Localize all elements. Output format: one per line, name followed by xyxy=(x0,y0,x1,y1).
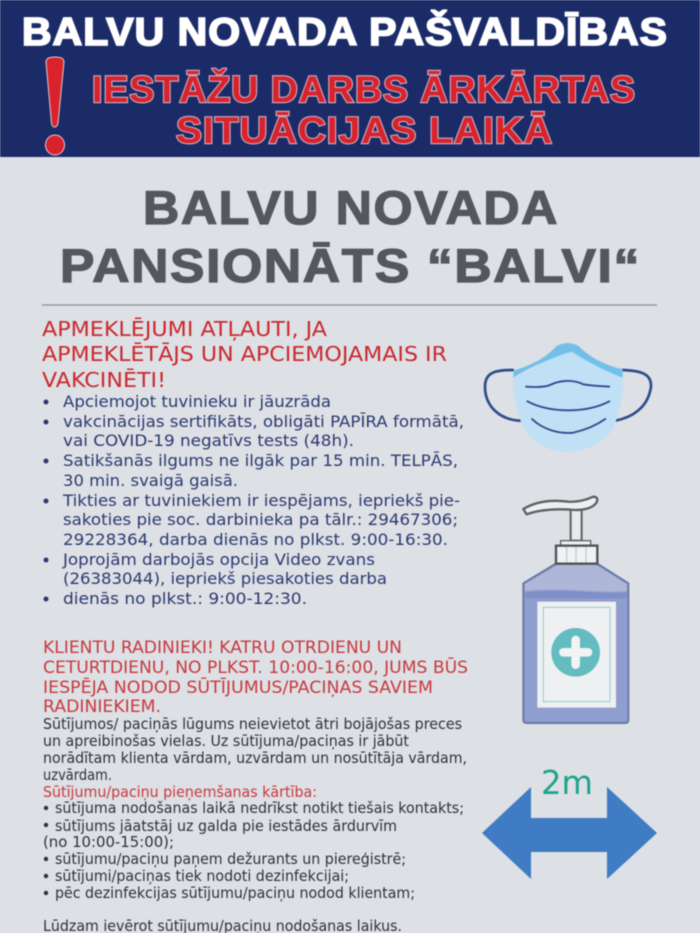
text block: parcel contents: un apreibinošas vielas. Uz sūtījuma/paciņas ir jābūt xyxy=(43,732,409,750)
text block: visit rules list: Apciemojot tuvinieku ir jāuzrāda xyxy=(63,392,331,411)
heading: visits allowed xyxy=(42,316,447,392)
text block: parcel contents: norādītam klienta vārdam, uzvārdam un nosūtītāja vārdam, xyxy=(43,749,467,767)
heading: clients' relatives parcels: IESPĒJA NODOD SŪTĪJUMUS/PACIŅAS SAVIEM xyxy=(43,676,433,698)
text block: parcel contents: Sūtījumos/ paciņās lūgums neievietot ātri bojājošas preces xyxy=(43,715,462,733)
heading: visits allowed: APMEKLĒTĀJS UN APCIEMOJAMAIS IR xyxy=(42,341,447,366)
icon: face mask xyxy=(485,343,651,452)
text block: visit rules list: dienās no plkst.: 9:00-12:30. xyxy=(63,589,307,608)
text block: visit rules list: sakoties pie soc. darbinieka pa tālr.: 29467306; xyxy=(63,510,458,529)
heading: clients' relatives parcels: CETURTDIENU, NO PLKST. 10:00-16:00, JUMS BŪS xyxy=(43,656,468,678)
title: pansionāts Balvi: BALVU NOVADA xyxy=(143,181,559,234)
heading: clients' relatives parcels: RADINIEKIEM. xyxy=(43,697,161,717)
text block: procedure list: sūtījuma nodošanas laikā nedrīkst notikt tiešais kontakts; xyxy=(55,799,464,817)
text block: visit rules list: 29228364, darba dienās no plkst. 9:00-16:30. xyxy=(63,530,448,549)
icon: exclamation mark xyxy=(46,57,64,155)
text block: procedure list: (no 10:00-15:00); xyxy=(43,833,174,851)
text block: procedure list xyxy=(43,799,464,933)
text block: visit rules list: vai COVID-19 negatīvs tests (48h). xyxy=(63,431,354,450)
heading: municipality: BALVU NOVADA PAŠVALDĪBAS xyxy=(22,9,668,54)
text block: visit rules list: (26383044), iepriekš piesakoties darba xyxy=(63,569,387,588)
text block: procedure list: pēc dezinfekcijas sūtījumu/paciņu nodod klientam; xyxy=(55,884,415,902)
heading: work during emergency: IESTĀŽU DARBS ĀRKĀRTAS xyxy=(92,68,636,110)
text block: visit rules list: Satikšanās ilgums ne ilgāk par 15 min. TELPĀS, xyxy=(63,451,458,470)
text block: visit rules list xyxy=(44,392,464,608)
label: 2m: 2m xyxy=(541,763,593,802)
text block: procedure list: sūtījums jāatstāj uz galda pie iestādes ārdurvīm xyxy=(55,817,397,835)
heading: clients' relatives parcels xyxy=(43,638,468,717)
heading: work during emergency xyxy=(92,68,636,151)
heading: visits allowed: APMEKLĒJUMI ATĻAUTI, JA xyxy=(42,316,327,341)
subheading: parcel acceptance procedure: Sūtījumu/paciņu pieņemšanas kārtība: xyxy=(43,783,317,801)
title: pansionāts Balvi xyxy=(60,181,641,292)
text block: visit rules list: Tikties ar tuviniekiem ir iespējams, iepriekš pie- xyxy=(62,491,460,510)
text block: parcel contents: uzvārdam. xyxy=(43,766,112,784)
text block: visit rules list: vakcinācijas sertifikāts, obligāti PAPĪRA formātā, xyxy=(63,412,464,431)
text block: visit rules list: 30 min. svaigā gaisā. xyxy=(63,471,238,490)
text block: procedure list: sūtījumu/paciņu paņem dežurants un piereģistrē; xyxy=(55,850,406,868)
text block: visit rules list: Joprojām darbojās opcija Video zvans xyxy=(62,550,375,569)
icon: hand sanitizer bottle xyxy=(523,497,628,723)
text block: procedure list: sūtījumi/paciņas tiek nodoti dezinfekcijai; xyxy=(55,867,349,885)
heading: visits allowed: VAKCINĒTI! xyxy=(42,367,166,392)
icon: 2m distance arrow xyxy=(482,763,657,879)
heading: work during emergency: SITUĀCIJAS LAIKĀ xyxy=(176,110,553,151)
heading: clients' relatives parcels: KLIENTU RADINIEKI! KATRU OTRDIENU UN xyxy=(43,638,402,658)
title: pansionāts Balvi: PANSIONĀTS “BALVI“ xyxy=(60,239,641,292)
text block: parcel contents xyxy=(43,715,467,784)
panel: header banner xyxy=(0,0,700,157)
